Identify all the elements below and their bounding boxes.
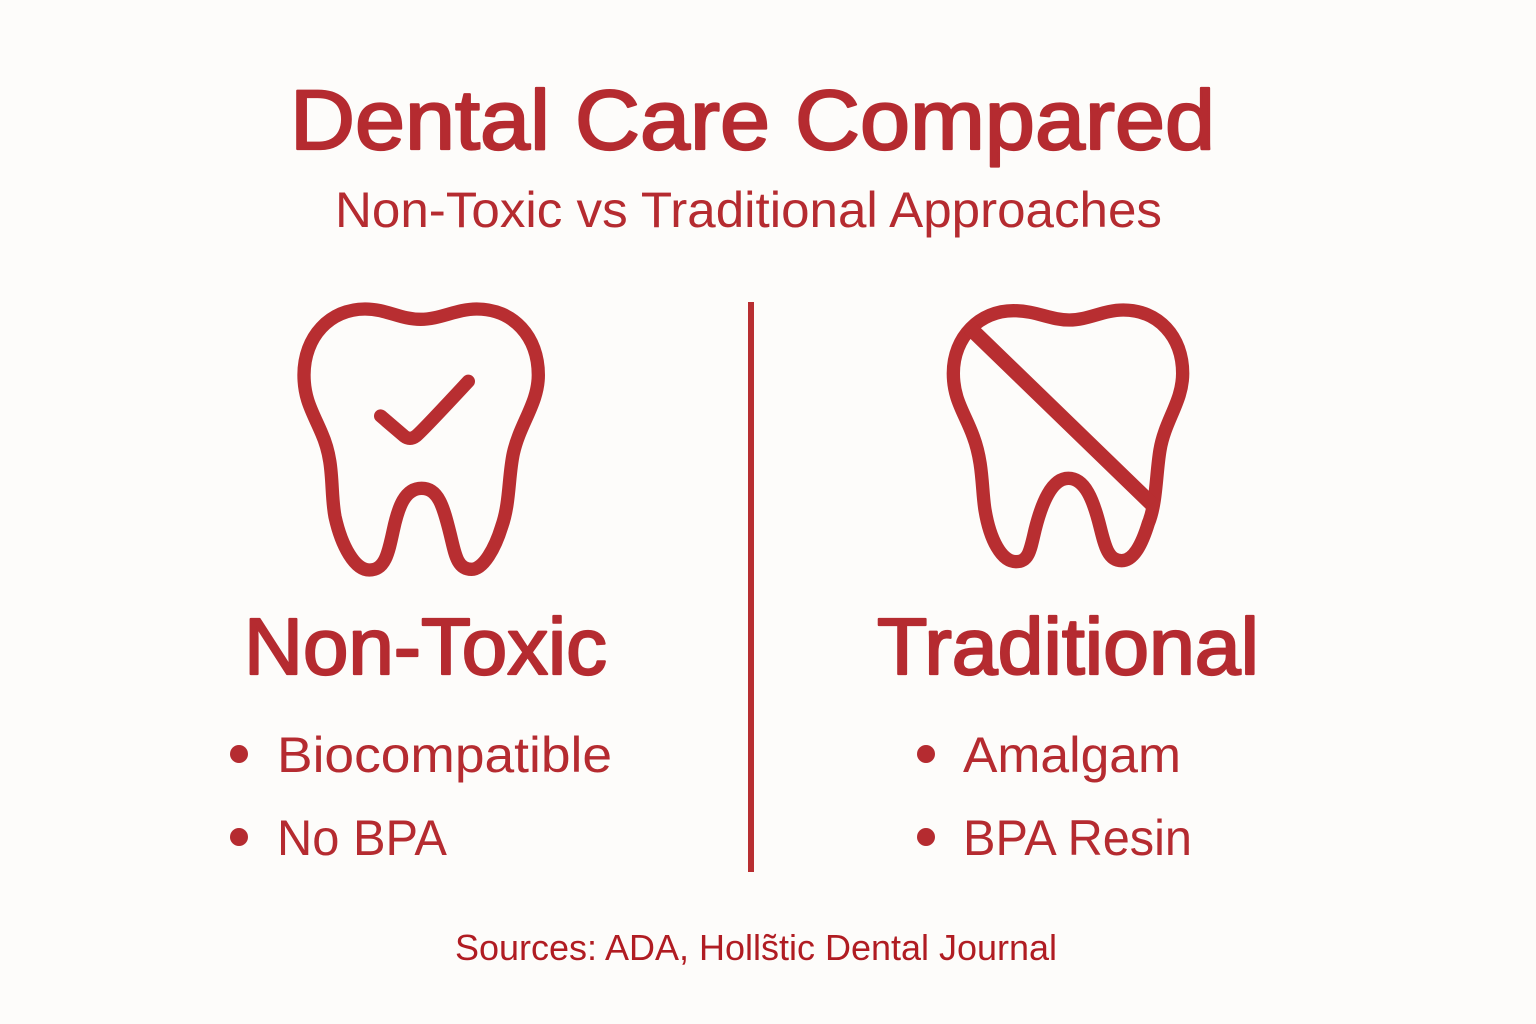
subtitle: Non-Toxic vs Traditional Approaches (335, 182, 1162, 238)
heading: non-toxic: Non-Toxic (244, 602, 607, 691)
sources footer: Sources: ADA, Holls̃tic Dental Journal (455, 927, 1057, 968)
list: traditional materials (917, 727, 1192, 866)
list: traditional materials: BPA Resin (963, 810, 1192, 866)
center divider (748, 302, 754, 872)
panel: non-toxic (230, 309, 612, 866)
list: non-toxic benefits: No BPA (277, 810, 448, 866)
heading: traditional: Traditional (877, 602, 1259, 691)
icon: tooth with slash (953, 310, 1183, 562)
list: non-toxic benefits (230, 727, 612, 866)
list: non-toxic benefits: Biocompatible (277, 727, 612, 783)
panel: traditional (877, 310, 1259, 866)
icon: tooth with check mark (304, 309, 538, 570)
list: traditional materials: Amalgam (963, 727, 1181, 783)
title: Dental Care Compared (290, 73, 1215, 167)
